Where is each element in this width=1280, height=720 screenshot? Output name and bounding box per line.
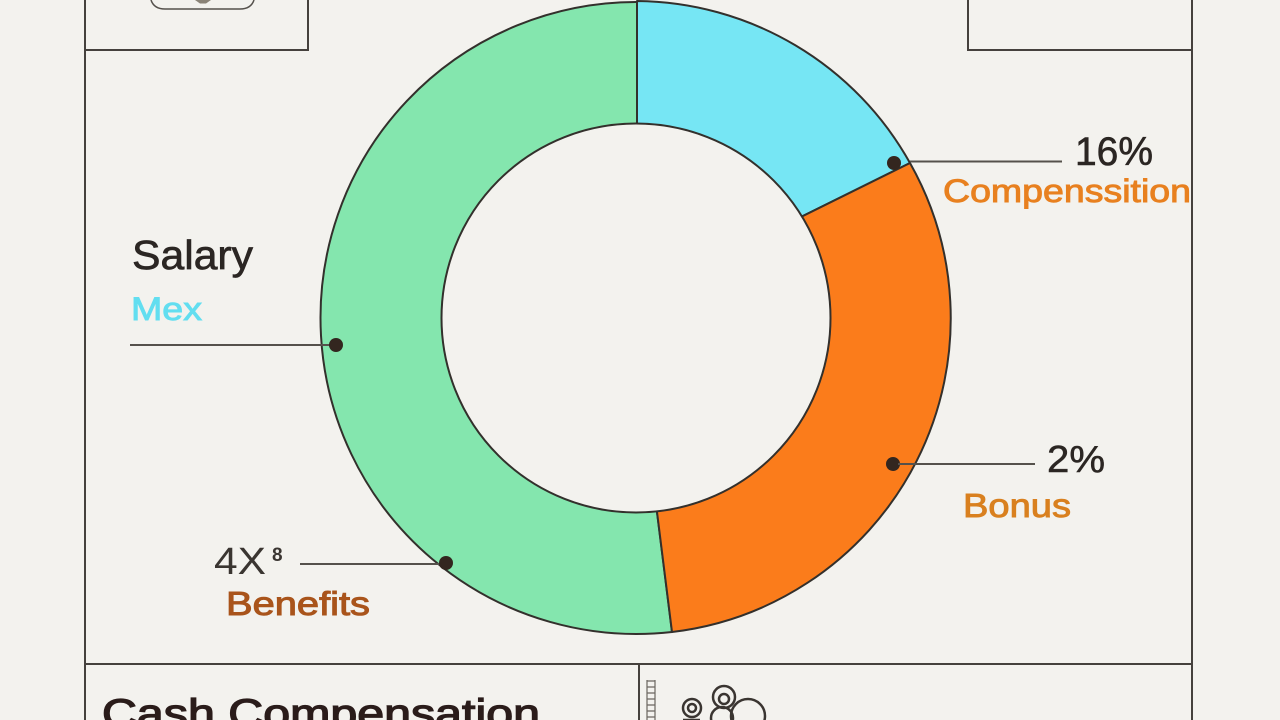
segment: bonus orange [643,163,951,632]
segment: compensation cyan [637,1,910,318]
icon: ruler ticks [647,680,655,720]
callout: benefits [214,541,453,622]
callout: bonus: Bonus [963,487,1071,524]
callout: benefits: 8 [272,545,283,566]
callout: salary: Mex [131,291,202,327]
callout: compensation: Compenssition [943,173,1191,209]
callout: bonus [886,439,1105,524]
donut chart [321,1,951,634]
donut hole [442,124,830,512]
segment: salary green [321,2,672,634]
callout: salary [130,232,343,352]
callout: salary: Salary [132,232,254,278]
callout: benefits: Benefits [226,585,370,622]
callout: compensation: 16% [1075,130,1153,174]
callout: compensation [887,130,1191,209]
icon: top badge [151,0,254,9]
icon: coins [683,686,765,720]
callout: benefits: 4X [214,541,266,583]
callout: bonus: 2% [1047,439,1105,481]
